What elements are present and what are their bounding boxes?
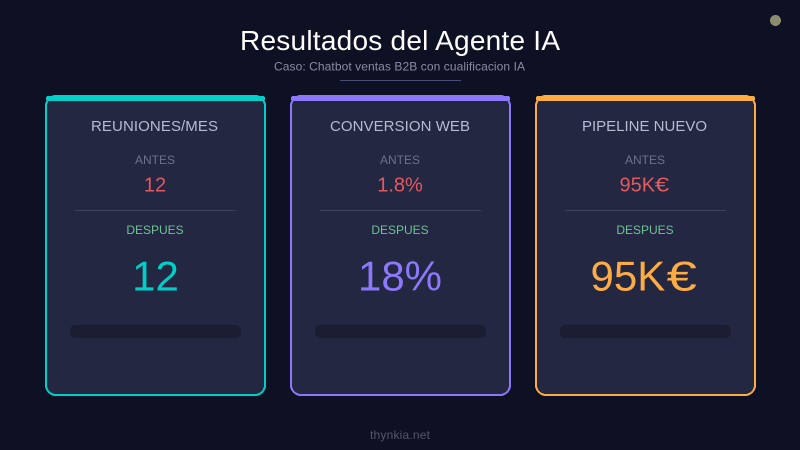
card heading: PIPELINE NUEVO [582,118,707,135]
before value: 1.8% [377,174,423,196]
after label: DESPUES [616,223,674,237]
panel: reuniones/mes [46,96,265,395]
before value: 12 [144,174,166,196]
progress bar track [70,325,241,338]
before label: ANTES [135,153,175,167]
before value [620,173,669,196]
after value [590,252,697,300]
top accent bar [291,96,510,101]
after label: DESPUES [371,223,429,237]
divider [565,210,726,211]
card heading: REUNIONES/MES [91,118,218,135]
card body [536,96,755,395]
status dot [770,15,781,26]
progress bar track [315,325,486,338]
after label: DESPUES [126,223,184,237]
before label: ANTES [380,153,420,167]
after value: 12 [132,252,179,300]
title underline [340,80,461,81]
card heading: CONVERSION WEB [330,118,470,135]
before value: € [655,173,669,196]
top accent bar [536,96,755,101]
before label: ANTES [625,153,665,167]
footer: thynkia.net [370,428,431,442]
before value: 95K [620,174,656,196]
divider [75,210,236,211]
title: Resultados del Agente IA [240,25,560,56]
panel: conversion web [291,96,510,395]
divider [320,210,481,211]
after value: 95K [590,252,665,300]
after value: 18% [358,252,442,300]
after value: € [666,253,697,300]
card body [46,96,265,395]
top accent bar [46,96,265,101]
progress bar track [560,325,731,338]
card body [291,96,510,395]
subtitle: Caso: Chatbot ventas B2B con cualificacion IA [274,60,525,74]
panel: pipeline nuevo [536,96,755,395]
